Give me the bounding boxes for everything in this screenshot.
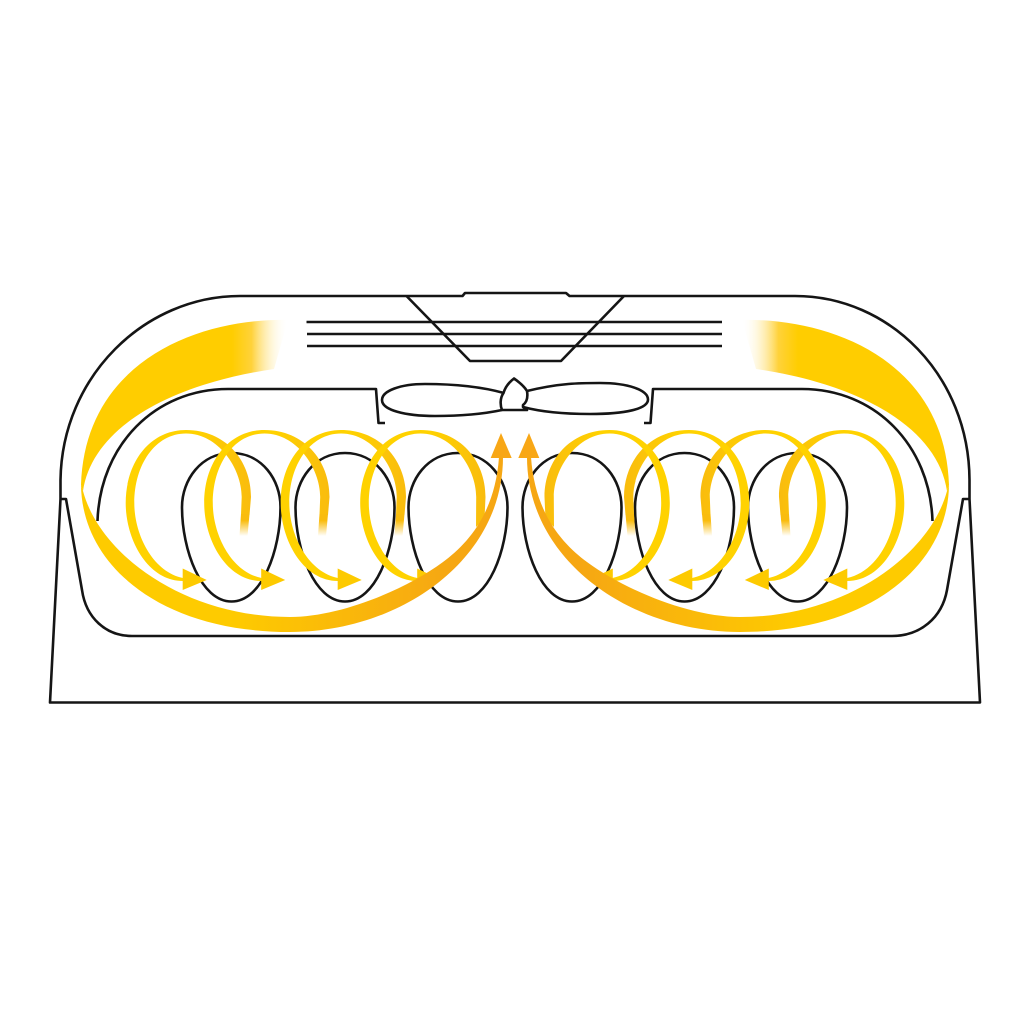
spiral arrow 3 (281, 430, 406, 590)
heating element vents (306, 296, 722, 361)
main airflow upper arc (81, 320, 288, 491)
main airflow lower arc (81, 457, 503, 632)
spiral arrow 7 (624, 430, 749, 590)
eggs (182, 453, 847, 602)
fan (382, 378, 648, 416)
arrowhead up right (518, 433, 539, 458)
airflow left side (81, 320, 512, 632)
spiral arrow 4 (360, 430, 486, 590)
main airflow upper arc right (742, 320, 949, 491)
spiral arrow 6 (700, 430, 826, 590)
incubator body: outer shell (50, 293, 980, 702)
spiral arrow 1 (126, 430, 251, 590)
spiral arrow 8 (544, 430, 670, 590)
airflow right side (518, 320, 949, 632)
spiral arrow 2 (204, 430, 330, 590)
spiral arrow 5 (779, 430, 904, 590)
main airflow lower arc right (527, 457, 949, 632)
arrowhead up (491, 433, 512, 458)
